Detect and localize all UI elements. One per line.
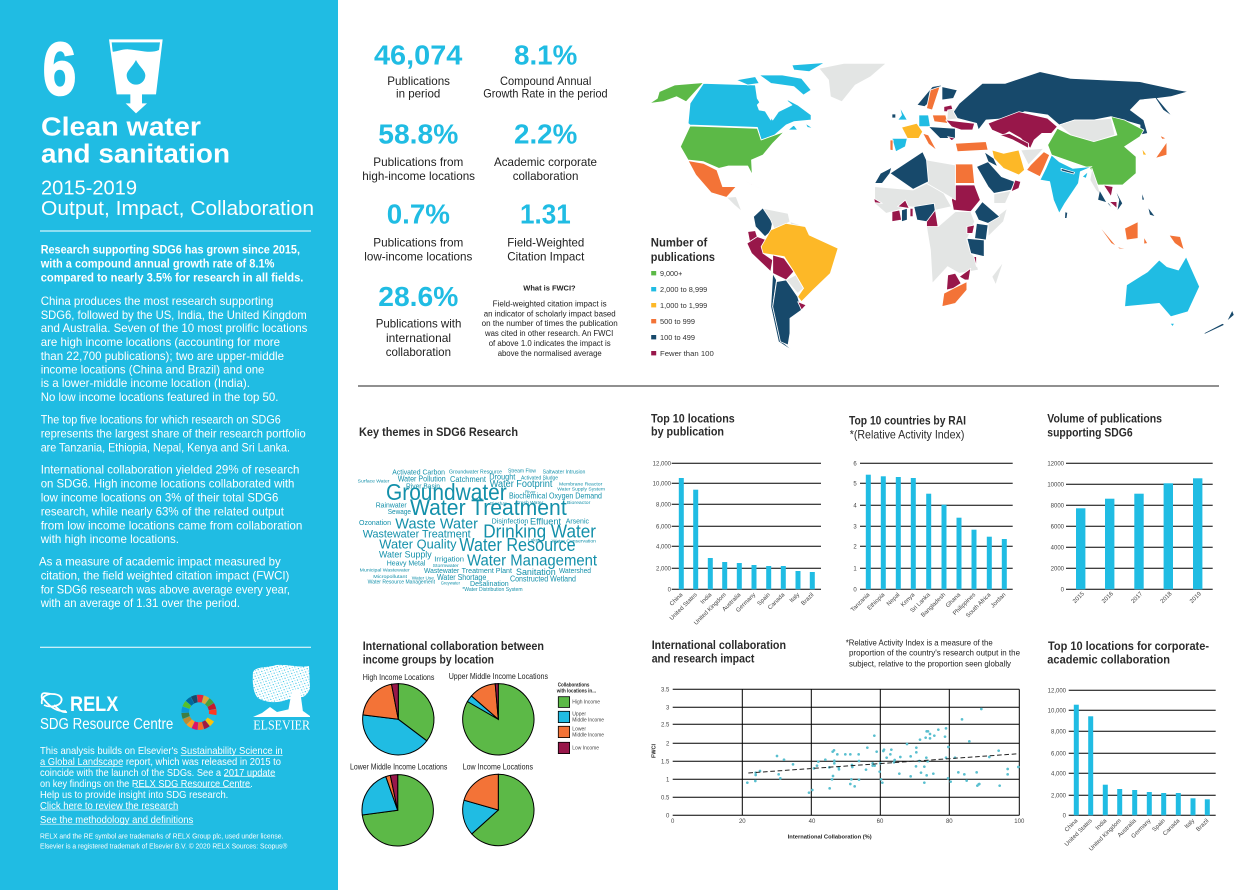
stat: low-income publications: 0.7% bbox=[387, 198, 450, 229]
word cloud: Water Resource bbox=[459, 535, 576, 555]
panel: volume of publications bbox=[1047, 412, 1213, 605]
panel: volume of publications: supporting SDG6 bbox=[1047, 426, 1133, 440]
word cloud: Bioreactor bbox=[567, 500, 591, 505]
stat: international collaboration: 28.6% bbox=[378, 281, 458, 312]
scatter plot: FWCI vs collaboration: 2 bbox=[666, 741, 670, 747]
bar chart: publications by location: 10,000 bbox=[653, 481, 672, 487]
text block: what is FWCI bbox=[482, 284, 618, 358]
stat: international collaboration: Publications with bbox=[376, 317, 461, 331]
word cloud: Groundwater Resource bbox=[449, 470, 502, 476]
word cloud: Treatment Plant bbox=[462, 568, 512, 575]
scatter plot: FWCI vs collaboration: 1 bbox=[666, 777, 670, 783]
panel: top 10 locations by publication: by publication bbox=[651, 425, 724, 439]
icon: SDG colour wheel bbox=[184, 697, 214, 727]
logo: Elsevier tree bbox=[253, 665, 311, 733]
subtitle: 2015-2019 bbox=[41, 177, 137, 199]
word cloud: Ozonation bbox=[359, 518, 391, 527]
stat: corporate collaboration bbox=[494, 118, 597, 183]
stat: publications: Publications bbox=[387, 74, 450, 88]
text block: international collaboration: from low income locations came from collaboration bbox=[41, 519, 302, 533]
text block: top producers: income locations (China and Brazil) and one bbox=[41, 362, 265, 376]
panel: international collaboration pies: International collaboration between bbox=[363, 639, 544, 653]
word cloud: Constructed Wetland bbox=[510, 575, 576, 584]
text block: what is FWCI: an indicator of scholarly impact based bbox=[484, 309, 616, 318]
bar chart: RAI by country: 1 bbox=[853, 566, 857, 572]
stat: corporate collaboration: Academic corporate bbox=[494, 155, 597, 169]
word cloud: Watershed bbox=[559, 568, 591, 575]
text block: what is FWCI: above the normalised average bbox=[498, 349, 602, 358]
callout: RAI definition: proportion of the country's research output in the bbox=[849, 648, 1020, 658]
panel: volume of publications: Volume of publications bbox=[1047, 412, 1162, 426]
bar chart: publications per year: 8000 bbox=[1051, 503, 1065, 509]
text block: report links: Click here to review the research bbox=[40, 801, 178, 812]
scatter plot: FWCI vs collaboration bbox=[652, 687, 1025, 841]
word cloud: River bbox=[525, 489, 536, 494]
text block: academic impact bbox=[39, 555, 290, 610]
word cloud: Groundwater bbox=[386, 479, 507, 505]
stat: high-income publications: 58.8% bbox=[378, 118, 458, 149]
bar chart: publications by location: Germany bbox=[735, 592, 757, 614]
pie chart: lower middle income bbox=[350, 763, 447, 846]
panel: international collaboration and research impact: and research impact bbox=[652, 652, 754, 666]
bar chart: RAI by country: 0 bbox=[853, 587, 857, 593]
bar chart: publications per year: 0 bbox=[1061, 587, 1065, 593]
bar chart: corporate-academic collaboration: 2,000 bbox=[1051, 793, 1067, 799]
bar chart: publications per year: 2019 bbox=[1189, 591, 1203, 605]
text block: what is FWCI: was cited in other research. An FWCI bbox=[484, 329, 613, 338]
word cloud: Irrigation bbox=[434, 557, 464, 564]
text block: academic impact: citation, the field weighted citation impact (FWCI) bbox=[41, 569, 289, 583]
bar chart: corporate-academic collaboration: India bbox=[1095, 818, 1109, 832]
bar chart: corporate-academic collaboration: 12,000 bbox=[1048, 688, 1067, 694]
stat: growth rate bbox=[483, 39, 608, 101]
word cloud: Drinking Water bbox=[483, 522, 596, 542]
bar chart: publications by location: China bbox=[669, 592, 685, 608]
text block: what is FWCI: What is FWCI? bbox=[523, 284, 576, 293]
subtitle: Output, Impact, Collaboration bbox=[41, 198, 314, 220]
scatter plot: FWCI vs collaboration: 40 bbox=[809, 819, 816, 825]
map legend: 2,000 to 8,999 bbox=[660, 285, 707, 294]
panel: top 10 countries by RAI: Top 10 countries by RAI bbox=[849, 413, 966, 427]
word cloud: Desalination bbox=[470, 579, 509, 588]
word cloud: Drought bbox=[489, 472, 516, 481]
text block: report links: This analysis builds on Elsevier's Sustainability Science in bbox=[40, 746, 283, 757]
word cloud bbox=[358, 468, 605, 593]
pie chart: upper middle income bbox=[449, 672, 548, 755]
pie legend: High Income bbox=[572, 700, 600, 706]
text block: what is FWCI: on the number of times the publication bbox=[482, 319, 618, 328]
scatter plot: FWCI vs collaboration: 3 bbox=[666, 705, 670, 711]
stat: FWCI: 1.31 bbox=[520, 198, 571, 229]
bar chart: publications by location: Spain bbox=[757, 592, 772, 607]
bar chart: RAI by country: 3 bbox=[853, 524, 857, 530]
word cloud: Fresh Water bbox=[516, 500, 544, 505]
text block: research share bbox=[41, 412, 306, 455]
bar chart: publications per year: 2015 bbox=[1072, 591, 1086, 605]
word cloud: Surface Water bbox=[358, 479, 390, 485]
logo: RELX SDG Resource Centre: SDG Resource Centre bbox=[40, 716, 173, 733]
text block: top producers: is a lower-middle income location (India). bbox=[41, 376, 250, 390]
text block: international collaboration: International collaboration yielded 29% of research bbox=[41, 463, 299, 477]
bar chart: RAI by country: 5 bbox=[853, 481, 857, 487]
logo: RELX SDG Resource Centre bbox=[40, 693, 173, 733]
bar chart: publications per year: 2017 bbox=[1131, 591, 1145, 605]
bar chart: publications by location: 6,000 bbox=[656, 524, 672, 530]
bar chart: publications per year: 4000 bbox=[1051, 545, 1065, 551]
scatter plot: FWCI vs collaboration: 0 bbox=[666, 813, 670, 819]
text block: research share: The top five locations for which research on SDG6 bbox=[41, 412, 281, 426]
text block: trademark notice bbox=[40, 831, 288, 850]
word cloud: River Basin bbox=[406, 483, 440, 490]
bar chart: corporate-academic collaboration: 6,000 bbox=[1051, 751, 1067, 757]
bar chart: publications by location: 2,000 bbox=[656, 566, 672, 572]
word cloud: Membrane Reactor bbox=[559, 482, 603, 488]
text block: academic impact: for SDG6 research was above average every year, bbox=[41, 583, 290, 597]
word cloud: Stormwater bbox=[433, 563, 459, 568]
panel: international collaboration pies bbox=[350, 639, 604, 846]
text block: key finding: Research supporting SDG6 has grown since 2015, bbox=[41, 243, 300, 257]
pie legend: Upper bbox=[572, 712, 586, 718]
word cloud: Disinfection bbox=[492, 519, 529, 526]
bar chart: publications by location: Brazil bbox=[801, 592, 815, 607]
text block: international collaboration: on SDG6. High income locations collaborated with bbox=[41, 477, 294, 491]
panel: international collaboration and research impact bbox=[652, 637, 1025, 841]
bar chart: RAI by country: 2 bbox=[853, 544, 857, 550]
bar chart: publications by location: Canada bbox=[767, 592, 787, 611]
text block: academic impact: with an average of 1.31 over the period. bbox=[40, 596, 240, 610]
text block: report links: coincide with the launch of the SDGs. See a 2017 update bbox=[40, 768, 276, 779]
word cloud: Sanitation bbox=[516, 567, 556, 577]
bar chart: publications per year: 2000 bbox=[1051, 566, 1065, 572]
word cloud: Catchment bbox=[450, 475, 487, 484]
panel: international collaboration pies: income groups by location bbox=[363, 652, 494, 666]
panel: top 10 countries by RAI: *(Relative Activity Index) bbox=[850, 428, 964, 442]
title bbox=[41, 114, 230, 168]
text block: top producers: are high income locations (accounting for more bbox=[41, 335, 280, 349]
pie legend bbox=[556, 683, 604, 754]
text block: top producers bbox=[41, 294, 307, 404]
panel: headline statistics bbox=[362, 39, 618, 359]
bar chart: corporate-academic collaboration: Spain bbox=[1152, 818, 1167, 833]
stat: international collaboration: international bbox=[386, 331, 451, 345]
panel: top 10 corporate-academic collaboration: academic collaboration bbox=[1047, 652, 1170, 666]
bar chart: RAI by country: Kenya bbox=[900, 592, 917, 608]
bar chart: publications per year: 2016 bbox=[1101, 591, 1115, 605]
goal number: 6 bbox=[42, 27, 76, 111]
logo: RELX SDG Resource Centre: RELX bbox=[70, 693, 118, 716]
bar chart: RAI by country: Tanzania bbox=[850, 592, 872, 613]
bar chart: publications by location: Australia bbox=[722, 592, 743, 613]
callout: RAI definition bbox=[846, 637, 1020, 668]
bar chart: publications per year: 10000 bbox=[1047, 482, 1065, 488]
bar chart: corporate-academic collaboration: 10,000 bbox=[1048, 708, 1067, 714]
word cloud: Water Shortage bbox=[437, 573, 487, 582]
bar chart: publications by location: 4,000 bbox=[656, 544, 672, 550]
bar chart: RAI by country: Ethiopia bbox=[867, 592, 887, 612]
scatter plot: FWCI vs collaboration: 1.5 bbox=[661, 759, 670, 765]
pie chart: high income: High Income Locations bbox=[363, 673, 434, 682]
panel: top 10 corporate-academic collaboration bbox=[1047, 639, 1216, 853]
scatter plot: FWCI vs collaboration: International Collaboration (%) bbox=[788, 835, 872, 841]
text block: top producers: and Australia. Seven of the 10 most prolific locations bbox=[41, 321, 307, 335]
bar chart: publications per year: 6000 bbox=[1051, 524, 1065, 530]
pie chart: low income bbox=[463, 763, 534, 846]
word cloud: Wastewater Treatment bbox=[363, 528, 471, 540]
icon: water glass with drop and arrow bbox=[109, 39, 163, 113]
bar chart: corporate-academic collaboration: 8,000 bbox=[1051, 729, 1067, 735]
subtitle bbox=[41, 177, 314, 220]
panel: left sidebar bbox=[0, 0, 338, 890]
stat: FWCI: Citation Impact bbox=[507, 250, 585, 264]
scatter plot: FWCI vs collaboration: 2.5 bbox=[661, 722, 670, 728]
word cloud: Lake bbox=[528, 537, 539, 542]
pie chart: lower middle income: Lower Middle Income Locations bbox=[350, 763, 447, 772]
pie legend: Low Income bbox=[572, 746, 599, 752]
word cloud: Water Treatment bbox=[410, 495, 567, 520]
pie legend: Middle Income bbox=[572, 717, 604, 723]
text block: international collaboration: research, while nearly 63% of the related output bbox=[41, 505, 285, 519]
map legend: Fewer than 100 bbox=[660, 349, 714, 358]
bar chart: RAI by country: Bangladesh bbox=[920, 592, 947, 619]
word cloud: Activated Carbon bbox=[392, 468, 445, 477]
text block: report links: a Global Landscape report, which was released in 2015 to bbox=[40, 757, 281, 768]
text block: trademark notice: RELX and the RE symbol are trademarks of RELX Group plc, used under license. bbox=[40, 831, 283, 840]
text block: international collaboration bbox=[40, 463, 302, 546]
map legend bbox=[651, 236, 715, 358]
bar chart: corporate-academic collaboration: Italy bbox=[1184, 818, 1196, 830]
text block: report links bbox=[40, 746, 283, 826]
word cloud: Water Supply bbox=[379, 549, 432, 559]
word cloud: Water Management bbox=[467, 552, 598, 569]
bar chart: publications per year bbox=[1047, 461, 1213, 605]
scatter plot: FWCI vs collaboration: 20 bbox=[739, 819, 746, 825]
word cloud: Water Footprint bbox=[490, 479, 553, 490]
pie chart: upper middle income: Upper Middle Income Locations bbox=[449, 672, 548, 681]
word cloud: Biochemical Oxygen Demand bbox=[509, 491, 602, 501]
stat: low-income publications bbox=[364, 198, 472, 264]
stat: growth rate: 8.1% bbox=[514, 39, 577, 70]
stat: high-income publications: high-income locations bbox=[362, 169, 475, 183]
word cloud: Waste Water bbox=[395, 515, 478, 532]
map legend: Number of bbox=[651, 236, 708, 250]
map legend: 1,000 to 1,999 bbox=[660, 301, 707, 310]
bar chart: corporate-academic collaboration: China bbox=[1064, 818, 1080, 834]
bar chart: corporate-academic collaboration: Brazil bbox=[1196, 818, 1210, 833]
map legend: 500 to 999 bbox=[660, 317, 695, 326]
scatter plot: FWCI vs collaboration: 80 bbox=[946, 819, 953, 825]
map legend: publications bbox=[651, 250, 715, 264]
panel: top 10 countries by RAI bbox=[849, 413, 1013, 619]
bar chart: corporate-academic collaboration: Canada bbox=[1162, 818, 1182, 837]
text block: research share: represents the largest share of their research portfolio bbox=[41, 427, 306, 441]
bar chart: RAI by country: South Africa bbox=[965, 592, 993, 619]
scatter plot: FWCI vs collaboration: 100 bbox=[1014, 819, 1025, 825]
word cloud: *Water Distribution System bbox=[462, 587, 523, 593]
bar chart: corporate-academic collaboration: 0 bbox=[1063, 813, 1067, 819]
map legend: 100 to 499 bbox=[660, 333, 695, 342]
pie legend: with locations in... bbox=[556, 688, 597, 694]
stat: low-income publications: Publications from bbox=[373, 236, 463, 250]
bar chart: RAI by country: Nepal bbox=[886, 592, 901, 608]
pie legend: Lower bbox=[572, 727, 586, 733]
bar chart: RAI by country: Philippines bbox=[952, 592, 977, 617]
bar chart: publications by location: India bbox=[700, 592, 714, 606]
text block: research share: are Tanzania, Ethiopia, Nepal, Kenya and Sri Lanka. bbox=[41, 441, 290, 455]
bar chart: RAI by country: Jordan bbox=[990, 592, 1007, 609]
text block: what is FWCI: Field-weighted citation impact is bbox=[493, 300, 607, 309]
bar chart: publications per year: 2018 bbox=[1160, 591, 1174, 605]
word cloud: Wastewater bbox=[424, 568, 460, 575]
word cloud: Effluent bbox=[530, 516, 562, 526]
text block: key finding bbox=[40, 243, 303, 285]
word cloud: Water Conservation bbox=[552, 538, 596, 544]
scatter plot: FWCI vs collaboration: 0 bbox=[671, 819, 675, 825]
bar chart: corporate-academic collaboration: Australia bbox=[1117, 818, 1138, 839]
title: and sanitation bbox=[41, 140, 230, 168]
word cloud: Sewage bbox=[388, 509, 411, 516]
word cloud: Rainwater bbox=[376, 503, 407, 510]
callout: RAI definition: *Relative Activity Index is a measure of the bbox=[846, 637, 993, 647]
bar chart: publications by location: Italy bbox=[789, 592, 801, 604]
bar chart: corporate-academic collaboration: 4,000 bbox=[1051, 771, 1067, 777]
bar chart: publications per year: 12000 bbox=[1047, 461, 1065, 467]
bar chart: RAI by country: 6 bbox=[853, 461, 857, 467]
stat: publications bbox=[374, 39, 463, 101]
panel: top 10 locations by publication: Top 10 locations bbox=[651, 411, 735, 425]
stat: FWCI: Field-Weighted bbox=[507, 236, 584, 250]
logo: Elsevier tree: ELSEVIER bbox=[253, 718, 311, 733]
panel: international collaboration and research impact: International collaboration bbox=[652, 638, 786, 652]
stat: growth rate: Compound Annual bbox=[500, 74, 591, 88]
stat: international collaboration: collaboration bbox=[386, 345, 451, 359]
word cloud: Water Supply System bbox=[557, 487, 605, 492]
text block: report links: on key findings on the RELX SDG Resource Centre. bbox=[40, 779, 253, 790]
bar chart: publications by location: 0 bbox=[668, 587, 672, 593]
panel: top 10 locations by publication bbox=[651, 411, 821, 627]
text block: trademark notice: Elsevier is a registered trademark of Elsevier B.V. © 2020 RELX Sources: Scopus® bbox=[40, 841, 288, 850]
bar chart: publications by location: 12,000 bbox=[653, 461, 672, 467]
text block: report links: Help us to provide insight into SDG research. bbox=[40, 790, 228, 801]
word cloud: Greywater bbox=[441, 581, 460, 586]
word cloud: Municipal Wastewater bbox=[360, 567, 410, 573]
stat: high-income publications bbox=[362, 118, 475, 183]
pie chart: high income bbox=[363, 673, 434, 755]
text block: top producers: No low income locations featured in the top 50. bbox=[41, 390, 278, 404]
word cloud: Micropollutant bbox=[373, 574, 408, 580]
word cloud: Water Quality bbox=[379, 536, 457, 551]
text block: academic impact: As a measure of academic impact measured by bbox=[39, 555, 281, 569]
word cloud: Water Use bbox=[412, 575, 434, 581]
text block: what is FWCI: of above 1.0 indicates the impact is bbox=[489, 339, 611, 348]
word cloud: Biochar bbox=[490, 501, 507, 506]
scatter plot: FWCI vs collaboration: 3.5 bbox=[661, 687, 670, 693]
text block: international collaboration: with high income locations. bbox=[40, 532, 179, 546]
stat: FWCI bbox=[507, 198, 585, 264]
stat: publications: 46,074 bbox=[374, 39, 463, 70]
text block: key finding: compared to nearly 3.5% for research in all fields. bbox=[41, 271, 303, 285]
panel: top 10 corporate-academic collaboration: Top 10 locations for corporate- bbox=[1048, 639, 1209, 653]
bar chart: corporate-academic collaboration: United States bbox=[1064, 818, 1094, 848]
bar chart: RAI by country bbox=[850, 461, 1013, 619]
scatter plot: FWCI vs collaboration: 0.5 bbox=[661, 795, 670, 801]
title: Clean water bbox=[41, 114, 201, 142]
bar chart: corporate-academic collaboration: United Kingdom bbox=[1088, 818, 1123, 853]
word cloud: Stream Flow bbox=[508, 468, 536, 474]
text block: top producers: SDG6, followed by the US, India, the United Kingdom bbox=[41, 308, 307, 322]
text block: top producers: than 22,700 publications); two are upper-middle bbox=[41, 349, 284, 363]
stat: publications: in period bbox=[396, 87, 440, 101]
text block: top producers: China produces the most research supporting bbox=[41, 294, 273, 308]
map legend: 9,000+ bbox=[660, 269, 683, 278]
text block: international collaboration: low income locations on 3% of their total SDG6 bbox=[41, 491, 279, 505]
pie chart: low income: Low Income Locations bbox=[463, 763, 533, 772]
word cloud: Arsenic bbox=[566, 519, 589, 526]
word cloud: Heavy Metal bbox=[387, 559, 426, 568]
bar chart: publications by location bbox=[653, 461, 821, 627]
pie legend: Middle Income bbox=[572, 732, 604, 738]
stat: corporate collaboration: collaboration bbox=[513, 169, 578, 183]
stat: low-income publications: low-income locations bbox=[364, 250, 472, 264]
bar chart: RAI by country: Sri Lanka bbox=[910, 592, 932, 614]
heading: key themes: Key themes in SDG6 Research bbox=[359, 425, 518, 439]
word cloud: Water Pollution bbox=[398, 475, 446, 484]
bar chart: corporate-academic collaboration bbox=[1048, 688, 1216, 853]
bar chart: RAI by country: Ghana bbox=[945, 592, 963, 609]
callout: RAI definition: subject, relative to the proportion seen globally bbox=[849, 658, 1012, 668]
bar chart: corporate-academic collaboration: Germany bbox=[1131, 818, 1152, 840]
pie legend: Collaborations bbox=[558, 683, 590, 689]
text block: key finding: with a compound annual growth rate of 8.1% bbox=[40, 257, 275, 271]
world map bbox=[650, 63, 1234, 352]
bar chart: publications by location: United Kingdom bbox=[693, 592, 728, 627]
bar chart: publications by location: 8,000 bbox=[656, 502, 672, 508]
stat: high-income publications: Publications from bbox=[373, 155, 463, 169]
scatter plot: FWCI vs collaboration: FWCI bbox=[652, 743, 658, 758]
word cloud: Water Resource Management bbox=[368, 580, 436, 586]
bar chart: RAI by country: 4 bbox=[853, 503, 857, 509]
stat: international collaboration bbox=[376, 281, 461, 359]
scatter plot: FWCI vs collaboration: 60 bbox=[877, 819, 884, 825]
stat: corporate collaboration: 2.2% bbox=[514, 118, 577, 149]
word cloud: Saltwater Intrusion bbox=[543, 469, 586, 475]
word cloud: Activated Sludge bbox=[521, 475, 558, 481]
bar chart: publications by location: United States bbox=[669, 592, 699, 622]
text block: report links: See the methodology and definitions bbox=[40, 815, 193, 826]
stat: growth rate: Growth Rate in the period bbox=[483, 87, 608, 101]
